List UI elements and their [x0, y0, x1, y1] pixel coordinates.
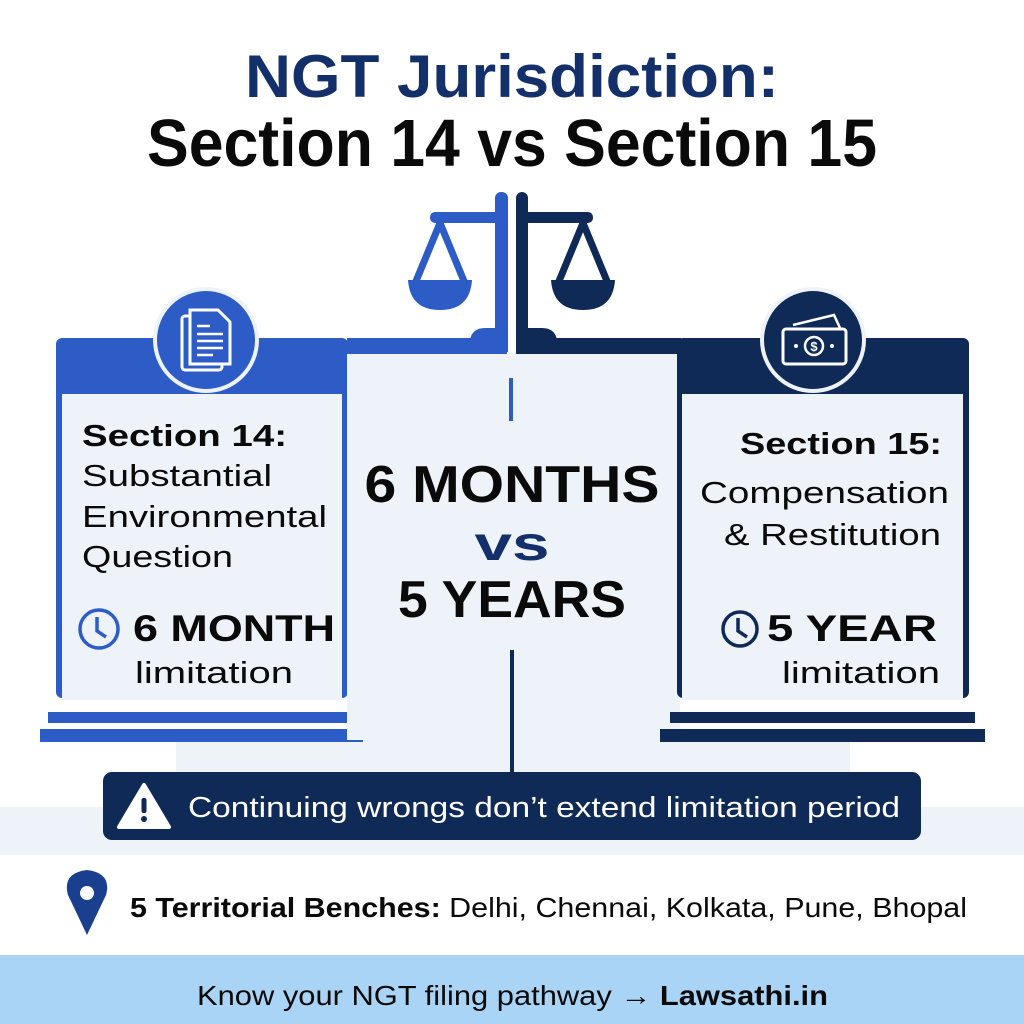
limitation: 6 month: limitation	[135, 655, 293, 690]
text: section 14: Question	[82, 539, 233, 574]
panel: center comparison: 5 YEARS	[398, 571, 626, 629]
icon: money: $	[810, 339, 818, 354]
panel: section 14	[40, 287, 507, 742]
text: section 15: & Restitution	[724, 517, 941, 552]
callout: warning	[103, 772, 921, 840]
footer band	[0, 955, 1024, 1024]
text: section 15	[700, 426, 949, 552]
background floor band	[0, 740, 1024, 855]
text: section 14: Environmental	[82, 499, 327, 534]
panel: center comparison: vs	[474, 518, 550, 571]
text: section 15: Compensation	[700, 475, 949, 510]
scale of justice	[408, 192, 615, 352]
text: section 14	[82, 418, 327, 574]
limitation: 6 month: 6 MONTH	[133, 608, 335, 649]
title	[147, 43, 877, 181]
text: section 14: Substantial	[82, 458, 272, 493]
benches row: 5 Territorial Benches: Delhi, Chennai, Kolkata, Pune, Bhopal	[130, 892, 967, 923]
title: NGT Jurisdiction:	[245, 43, 779, 110]
icon: money	[760, 287, 866, 393]
limitation: 5 year: limitation	[782, 655, 940, 690]
icon: document	[153, 287, 259, 393]
panel: section 15	[516, 287, 985, 742]
footer band: Know your NGT filing pathway → Lawsathi.in	[197, 980, 828, 1011]
panel: center comparison: 6 MONTHS	[364, 456, 660, 514]
text: section 14: Section 14:	[82, 418, 287, 453]
limitation: 6 month	[80, 608, 335, 690]
text: section 15: Section 15:	[740, 426, 942, 461]
limitation: 5 year: 5 YEAR	[767, 608, 937, 649]
title: Section 14 vs Section 15	[147, 106, 877, 181]
benches row	[67, 870, 967, 935]
icon: location pin	[67, 870, 107, 935]
limitation: 5 year	[723, 608, 940, 690]
panel: center comparison	[347, 354, 680, 772]
callout: warning: Continuing wrongs don’t extend limitation period	[188, 792, 900, 824]
icon: warning triangle	[119, 785, 169, 827]
